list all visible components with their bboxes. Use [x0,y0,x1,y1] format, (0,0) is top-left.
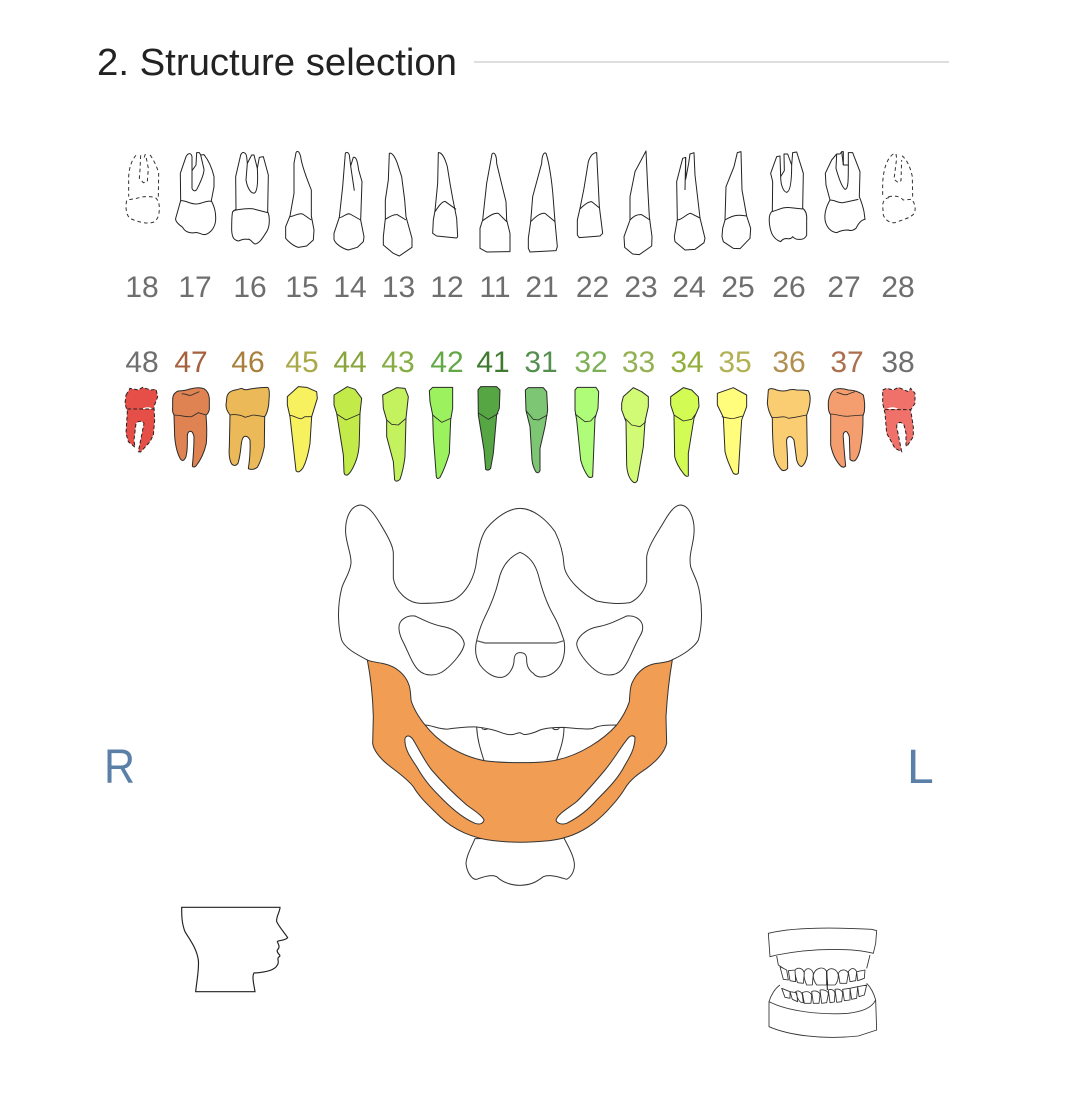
tooth 42 [429,387,453,479]
upper tooth numbers: 22 [576,271,609,304]
left side label: L [907,741,934,794]
tooth 28 [883,154,915,223]
lower tooth numbers: 48 [125,346,159,379]
upper skull [339,505,702,677]
tooth 13 [383,153,412,256]
icon: dental model [768,928,877,1037]
lower tooth numbers: 36 [772,346,806,379]
right side label: R [104,741,135,794]
lower left teeth 31 to 38 [525,387,915,483]
lower jaw and hyoid [367,660,672,885]
tooth 32 [575,387,599,477]
tooth 47 [172,388,209,467]
upper tooth numbers: 15 [285,271,319,304]
lower tooth numbers: 33 [622,346,655,379]
lower tooth numbers: 37 [830,346,864,379]
tooth 46 [226,387,269,469]
upper tooth numbers: 14 [333,271,367,304]
upper tooth numbers: 24 [672,271,706,304]
lower tooth numbers: 46 [231,346,265,379]
lower tooth numbers: 42 [430,346,464,379]
lower tooth numbers: 34 [670,346,704,379]
lower tooth numbers: 31 [524,346,558,379]
tooth 43 [383,388,408,481]
tooth 48 [125,387,158,452]
upper left teeth 21 to 28 [528,151,915,255]
tooth 24 [674,153,705,250]
lower tooth numbers: 45 [285,346,319,379]
tooth 41 [478,387,500,470]
mandible [367,660,672,842]
tooth 26 [769,152,807,242]
tooth 45 [287,387,317,472]
tooth 37 [828,389,865,467]
tooth 17 [176,153,216,235]
tooth 12 [433,153,458,238]
tooth 21 [528,153,557,252]
tooth 25 [722,152,751,249]
tooth 23 [624,151,652,255]
upper tooth numbers: 27 [827,271,861,304]
tooth 18 [126,154,159,223]
tooth 15 [286,151,314,247]
upper tooth numbers: 12 [430,271,464,304]
lower tooth numbers: 35 [718,346,752,379]
lower tooth numbers: 44 [333,346,367,379]
upper tooth numbers: 28 [881,271,915,304]
tooth 34 [671,388,699,476]
lower right teeth 48 to 41 [125,387,500,481]
tooth 33 [622,388,648,483]
lower tooth numbers: 41 [476,346,510,379]
upper tooth numbers [125,271,915,304]
lower tooth numbers: 43 [381,346,415,379]
tooth 31 [525,388,548,473]
upper tooth numbers: 25 [721,271,755,304]
tooth 44 [334,387,362,475]
upper tooth numbers: 13 [382,271,415,304]
icon: head profile [182,907,288,992]
tooth 38 [883,387,915,452]
skull diagram [339,505,702,885]
tooth 22 [577,153,603,238]
lower tooth numbers: 32 [574,346,608,379]
tooth 27 [825,152,865,233]
upper tooth numbers: 21 [525,271,559,304]
tooth 11 [480,153,510,252]
upper tooth numbers: 11 [479,271,511,304]
title: 2. Structure selection [97,42,457,84]
tooth 35 [717,388,747,474]
upper tooth numbers: 23 [624,271,658,304]
lower tooth numbers: 47 [174,346,208,379]
upper tooth numbers: 16 [233,271,267,304]
upper right teeth 18 to 11 [126,151,510,256]
lower tooth numbers: 38 [881,346,915,379]
tooth 16 [232,153,269,244]
tooth 14 [334,152,364,250]
lower tooth numbers [125,346,915,379]
tooth 36 [767,389,810,471]
upper tooth numbers: 26 [772,271,806,304]
upper tooth numbers: 18 [125,271,159,304]
upper tooth numbers: 17 [178,271,212,304]
